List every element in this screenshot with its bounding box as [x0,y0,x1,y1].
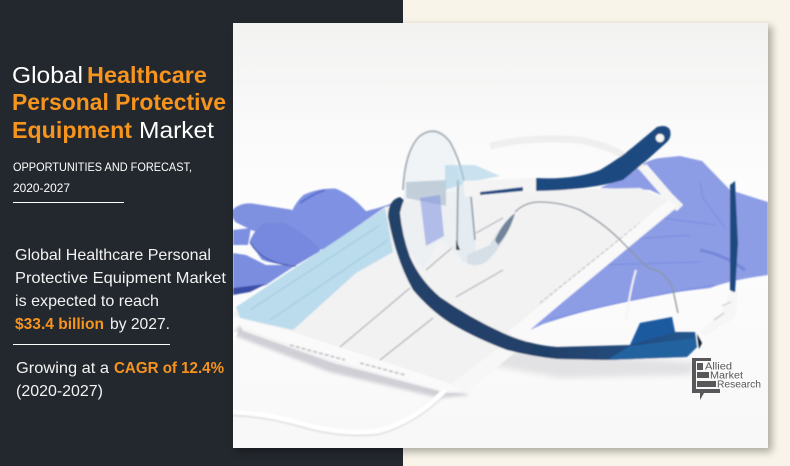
face mask [233,188,680,393]
title: Equipment [12,117,132,143]
title: Market [139,117,214,143]
CAGR statement: (2020-2027) [16,383,103,400]
temple reflection [445,165,500,190]
left temple arm [463,178,536,197]
market size statement [15,247,227,333]
panel: dark sidebar [0,0,403,466]
photo: PPE equipment [233,23,768,448]
CAGR statement: Growing at a [16,360,109,377]
title: Healthcare [87,62,207,88]
subtitle [13,160,192,195]
subtitle: 2020-2027 [13,181,70,195]
shadow under frame [490,350,695,378]
right temple arm [730,181,738,293]
glasses [388,126,738,360]
market size statement: Protective Equipment Market [15,270,227,287]
left glove [233,190,394,295]
logo: Allied Market Research: Research [717,380,761,390]
title: Global [12,62,83,88]
lens nose bridge [467,226,506,266]
upper ear loop [490,136,645,171]
logo: Allied Market Research: Allied [705,362,732,372]
right lens [515,202,678,313]
left lens [402,133,456,250]
lower ear loop [233,398,441,436]
subtitle: OPPORTUNITIES AND FORECAST, [13,160,192,174]
logo: Allied Market Research [692,358,761,400]
mask shadow on table [233,325,470,398]
market size statement: by 2027. [110,316,170,333]
title [12,62,226,143]
CAGR statement [16,360,224,400]
photo shadow [236,26,772,452]
logo: Allied Market Research: Market [710,370,743,382]
right glove [530,156,768,330]
market size statement: is expected to reach [15,293,159,310]
CAGR statement: CAGR of 12.4% [114,360,224,377]
main frame [388,197,697,360]
market size statement: Global Healthcare Personal [15,247,211,264]
title: Personal Protective [12,89,226,115]
background: cream side [403,0,790,466]
market size statement: $33.4 billion [15,316,104,333]
